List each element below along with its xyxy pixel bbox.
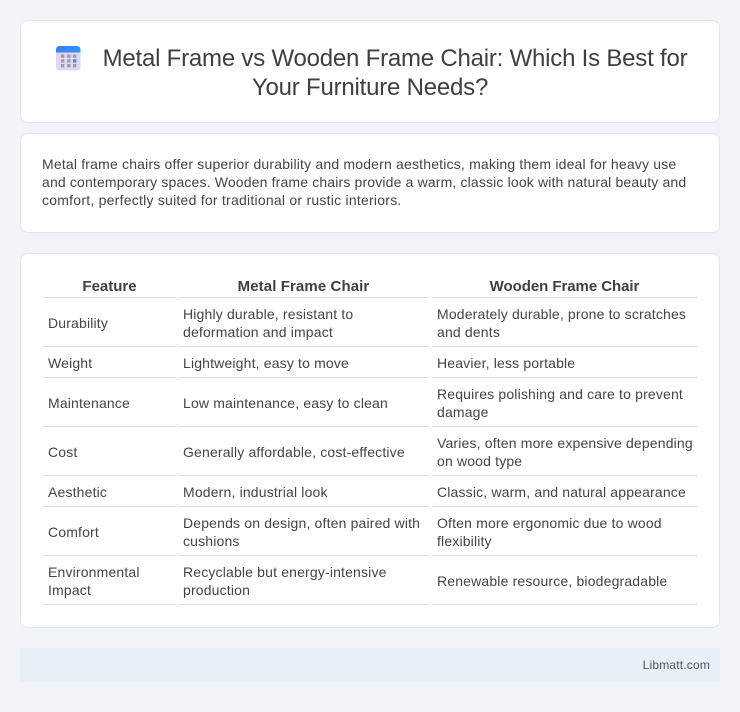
intro paragraph: and contemporary spaces. Wooden frame chairs provide a warm, classic look with natural beauty and (42, 174, 686, 190)
row: aesthetic: Aesthetic (48, 484, 107, 500)
row: durability: Moderately durable, prone to scratches (437, 306, 686, 322)
row: durability (48, 306, 686, 340)
table header row (82, 278, 640, 295)
table header row: Wooden Frame Chair (490, 278, 639, 295)
row: comfort (48, 515, 662, 549)
intro paragraph: comfort, perfectly suited for traditional or rustic interiors. (42, 192, 402, 208)
row: cost: Cost (48, 444, 77, 460)
row: maintenance: damage (437, 404, 489, 420)
row: durability: deformation and impact (183, 324, 333, 340)
row: durability: Durability (48, 315, 108, 331)
row: environmental impact: Renewable resource, biodegradable (437, 573, 667, 589)
footer bar (20, 648, 720, 682)
row: environmental impact: production (183, 582, 250, 598)
row: cost: on wood type (437, 453, 522, 469)
table header row: Metal Frame Chair (238, 278, 369, 295)
row: weight: Weight (48, 355, 92, 371)
row: cost: Varies, often more expensive depending (437, 435, 693, 451)
row: comfort: Comfort (48, 524, 99, 540)
row: environmental impact (48, 564, 667, 598)
title (103, 45, 688, 101)
row: durability: and dents (437, 324, 500, 340)
footer credit: Libmatt.com (643, 658, 710, 672)
comparison table panel (20, 253, 720, 628)
intro paragraph: Metal frame chairs offer superior durability and modern aesthetics, making them ideal for heavy use (42, 156, 676, 172)
row: maintenance (48, 386, 683, 420)
row: weight (48, 355, 575, 371)
row: maintenance: Maintenance (48, 395, 130, 411)
title: Metal Frame vs Wooden Frame Chair: Which Is Best for (103, 45, 687, 72)
row: comfort: Depends on design, often paired with (183, 515, 420, 531)
row: cost (48, 435, 693, 469)
table header row: Feature (82, 278, 137, 295)
header panel (20, 20, 720, 123)
intro paragraph (42, 156, 686, 208)
row: durability: Highly durable, resistant to (183, 306, 353, 322)
row: aesthetic: Classic, warm, and natural appearance (437, 484, 686, 500)
row: weight: Lightweight, easy to move (183, 355, 349, 371)
row: comfort: Often more ergonomic due to wood (437, 515, 662, 531)
intro text panel (20, 133, 720, 233)
row: weight: Heavier, less portable (437, 355, 575, 371)
row: comfort: cushions (183, 533, 240, 549)
icon: calendar (56, 46, 80, 70)
row: aesthetic: Modern, industrial look (183, 484, 328, 500)
row: maintenance: Requires polishing and care to prevent (437, 386, 683, 402)
row: environmental impact: Recyclable but energy-intensive (183, 564, 387, 580)
row: aesthetic (48, 484, 686, 500)
row: cost: Generally affordable, cost-effective (183, 444, 405, 460)
row: comfort: flexibility (437, 533, 492, 549)
row: environmental impact: Impact (48, 582, 91, 598)
title: Your Furniture Needs? (252, 74, 488, 101)
row: maintenance: Low maintenance, easy to clean (183, 395, 388, 411)
row: environmental impact: Environmental (48, 564, 140, 580)
